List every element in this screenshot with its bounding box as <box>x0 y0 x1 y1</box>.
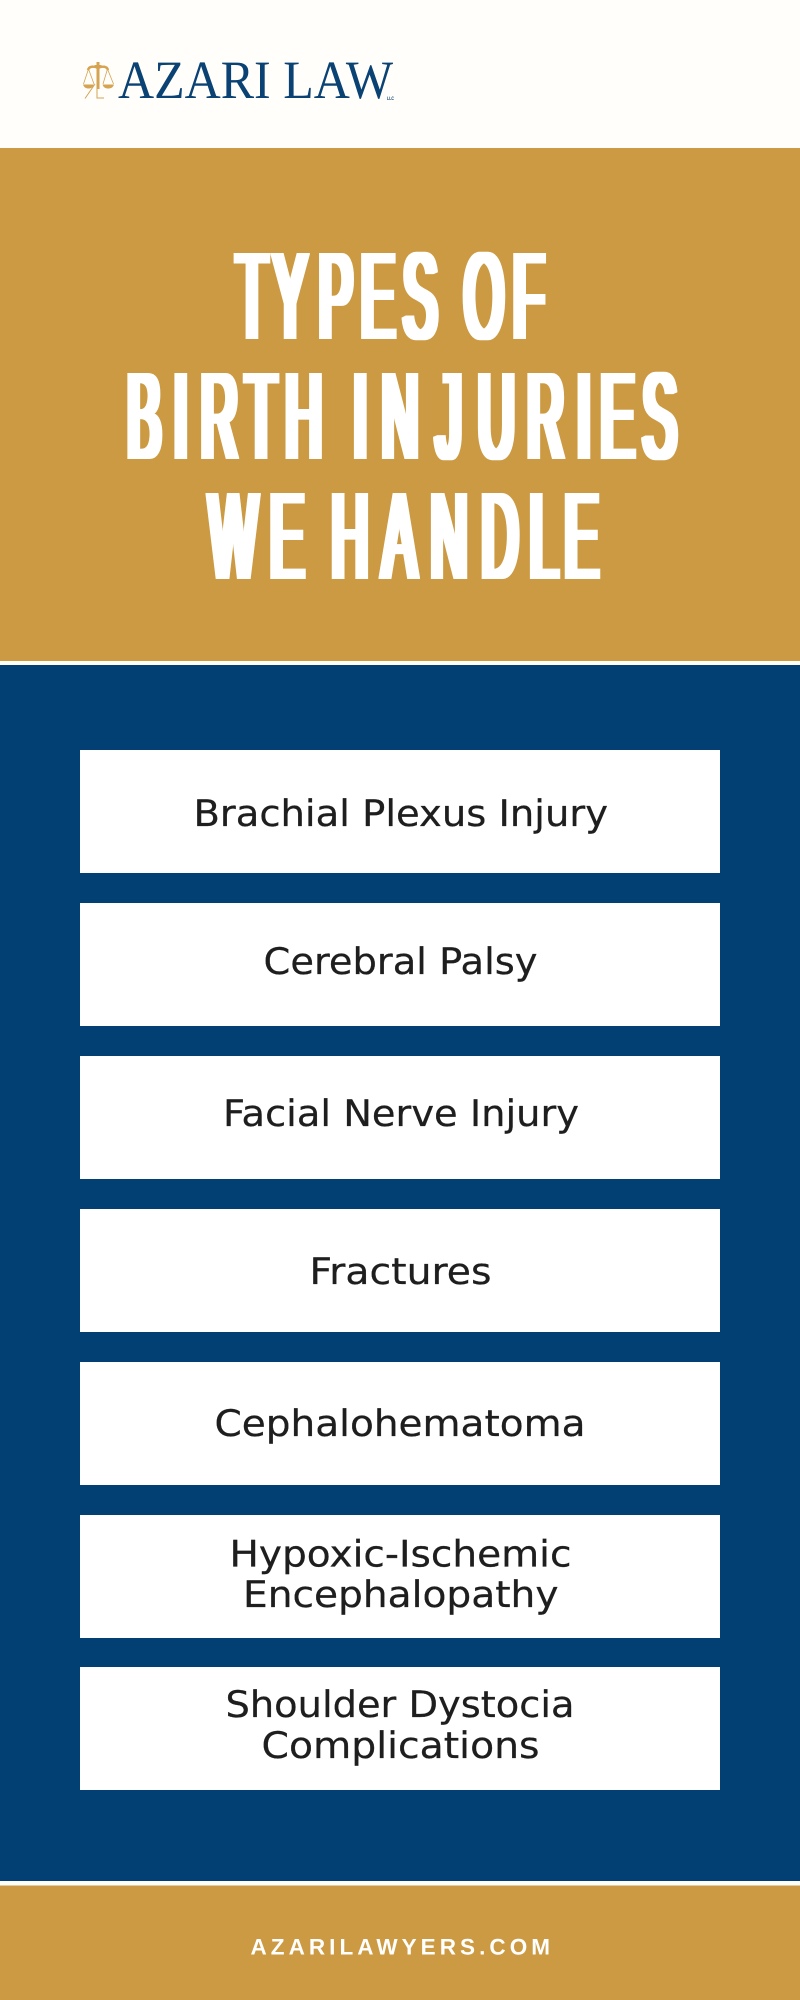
title: TYPES OF <box>236 228 544 366</box>
card: Cerebral Palsy <box>80 903 720 1026</box>
panel: title band <box>0 148 800 661</box>
card: Cerebral Palsy: Cerebral Palsy <box>264 940 538 983</box>
logo wordmark: AZARI LAW <box>118 50 393 110</box>
card: Shoulder Dystocia Complications: Complications <box>262 1724 540 1767</box>
logo suffix: LLC <box>387 96 394 102</box>
card: Fractures <box>80 1209 720 1332</box>
card: Facial Nerve Injury: Facial Nerve Injury <box>223 1092 579 1135</box>
card: Brachial Plexus Injury: Brachial Plexus Injury <box>194 792 608 835</box>
card: Brachial Plexus Injury <box>80 750 720 873</box>
card: Shoulder Dystocia Complications <box>80 1667 720 1790</box>
card: Cephalohematoma: Cephalohematoma <box>214 1402 586 1445</box>
title: WE HANDLE <box>209 468 598 606</box>
panel: injury list background <box>0 665 800 1881</box>
card: Hypoxic-Ischemic Encephalopathy: Encephalopathy <box>243 1573 558 1616</box>
card: Shoulder Dystocia Complications: Shoulder Dystocia <box>226 1683 574 1726</box>
card: Fractures: Fractures <box>310 1250 492 1293</box>
panel: footer band <box>0 1886 800 2000</box>
title: BIRTH INJURIES <box>127 348 677 486</box>
card: Cephalohematoma <box>80 1362 720 1485</box>
card: Hypoxic-Ischemic Encephalopathy <box>80 1515 720 1638</box>
footer website: AZARILAWYERS.COM <box>250 1935 550 1960</box>
card: Facial Nerve Injury <box>80 1056 720 1179</box>
icon: scales of justice <box>83 62 114 98</box>
title <box>127 228 677 606</box>
card: Hypoxic-Ischemic Encephalopathy: Hypoxic-Ischemic <box>230 1533 572 1576</box>
logo <box>83 50 394 110</box>
